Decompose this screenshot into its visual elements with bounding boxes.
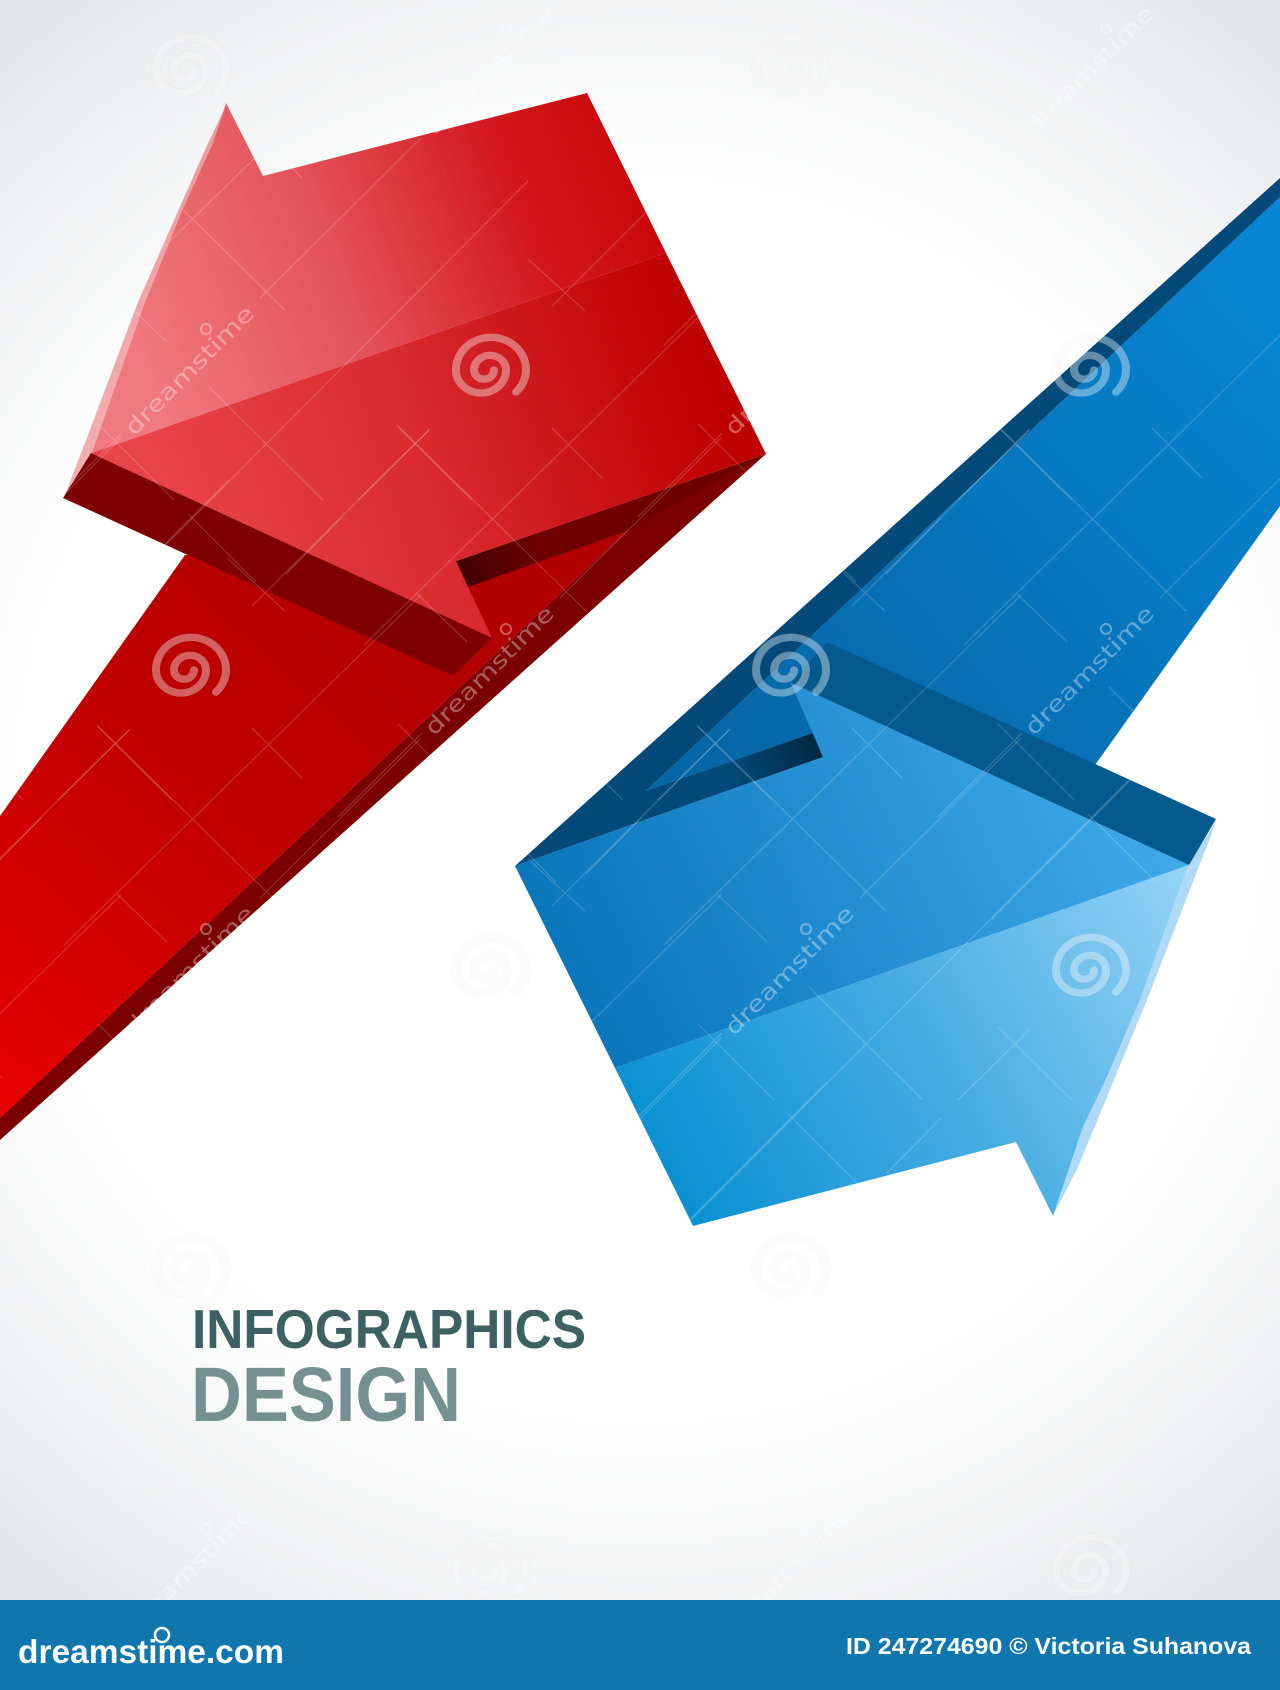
footer credit: ID 247274690 © Victoria Suhanova [846, 1633, 1251, 1659]
red folded arrow [0, 93, 766, 1140]
watermark text: dreamstime [420, 1201, 560, 1341]
title line: design: DESIGN [191, 1352, 461, 1438]
red arrow sheen sliver [63, 103, 227, 500]
footer logo spiral [155, 1628, 169, 1642]
blue arrow head lower facet [615, 865, 1189, 1226]
watermark text: dreamstime [120, 901, 260, 1041]
blue ribbon side strip [515, 178, 1280, 866]
watermark text: dreamstime [120, 301, 260, 441]
watermark text [120, 1, 1160, 1641]
footer bar [0, 1600, 1280, 1690]
red arrow head upper facet [91, 93, 666, 453]
watermark text: dreamstime [420, 1, 560, 141]
blue arrow head upper facet [515, 683, 1189, 1068]
red arrow head lower facet [91, 253, 766, 638]
red fold band [63, 453, 492, 676]
red arrow ribbon [0, 531, 627, 1118]
blue arrow ribbon [646, 197, 1280, 791]
red ribbon side strip [0, 454, 766, 1140]
title [191, 1298, 586, 1438]
blue arrow sheen sliver [1053, 820, 1217, 1216]
watermark text: dreamstime [720, 301, 860, 441]
blue folded arrow [515, 178, 1280, 1226]
footer logo: dreamstime.com [18, 1633, 284, 1670]
watermark text: dreamstime [120, 1501, 260, 1641]
watermark spirals [156, 37, 1126, 1593]
watermark text: dreamstime [1020, 1201, 1160, 1341]
watermark text: dreamstime [720, 1501, 860, 1641]
red fold shadow [456, 454, 766, 587]
blue fold shadow [600, 733, 823, 835]
blue fold band [791, 642, 1216, 865]
watermark text: dreamstime [1020, 1, 1160, 141]
watermark text: dreamstime [720, 901, 860, 1041]
watermark text: dreamstime [1020, 601, 1160, 741]
watermark text: dreamstime [420, 601, 560, 741]
title line: infographics: INFOGRAPHICS [192, 1298, 586, 1360]
